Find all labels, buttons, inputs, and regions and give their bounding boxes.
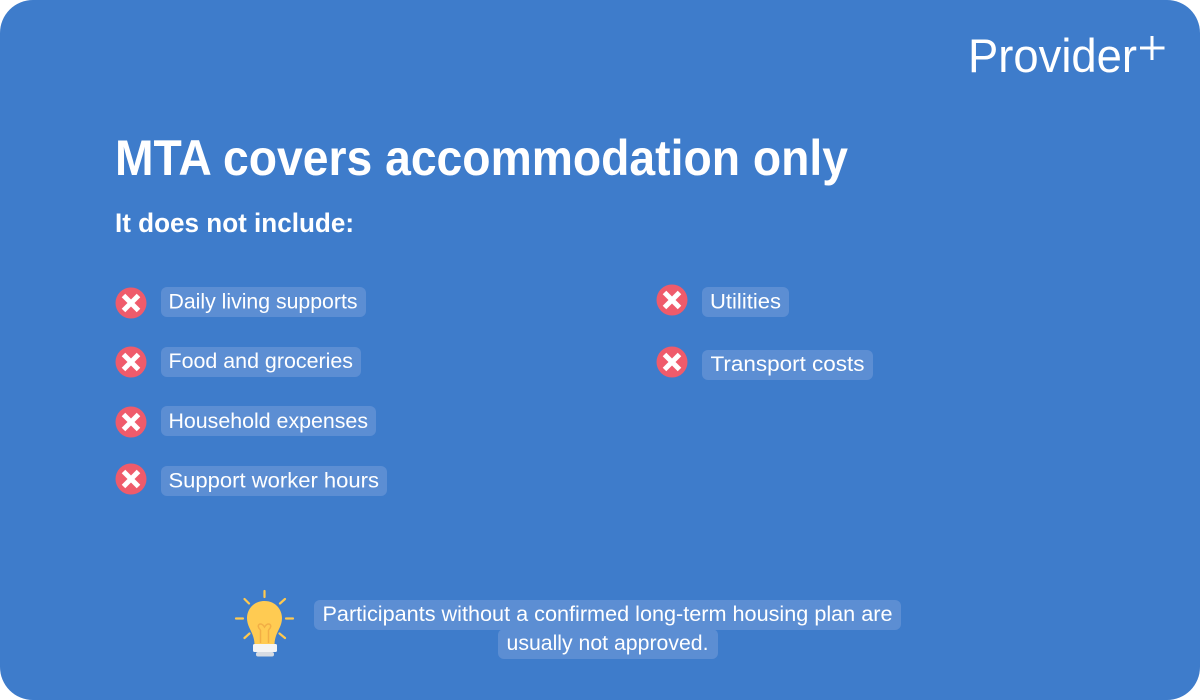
list item: Support worker hours: Support worker hours bbox=[168, 468, 379, 492]
callout text: usually not approved. bbox=[506, 631, 708, 655]
list item: Household expenses: Household expenses bbox=[168, 409, 368, 433]
list item: Daily living supports: Daily living supports bbox=[168, 290, 358, 314]
callout text: Participants without a confirmed long-term housing plan are bbox=[322, 602, 892, 626]
list item: Food and groceries bbox=[116, 346, 361, 378]
list item: Support worker hours bbox=[116, 464, 387, 496]
subtitle: It does not include: bbox=[115, 208, 354, 238]
logo: Provider+: Provider bbox=[968, 29, 1137, 82]
list item: Household expenses bbox=[116, 406, 376, 438]
list item: Transport costs bbox=[656, 346, 873, 380]
title: MTA covers accommodation only bbox=[115, 130, 848, 186]
list item: Transport costs: Transport costs bbox=[710, 352, 864, 376]
list item: Utilities: Utilities bbox=[710, 290, 781, 314]
list item: Daily living supports bbox=[116, 287, 366, 318]
callout text bbox=[314, 600, 901, 659]
list item: Food and groceries: Food and groceries bbox=[168, 349, 353, 373]
icon: light bulb bbox=[236, 591, 293, 656]
list item: Utilities bbox=[656, 284, 789, 317]
